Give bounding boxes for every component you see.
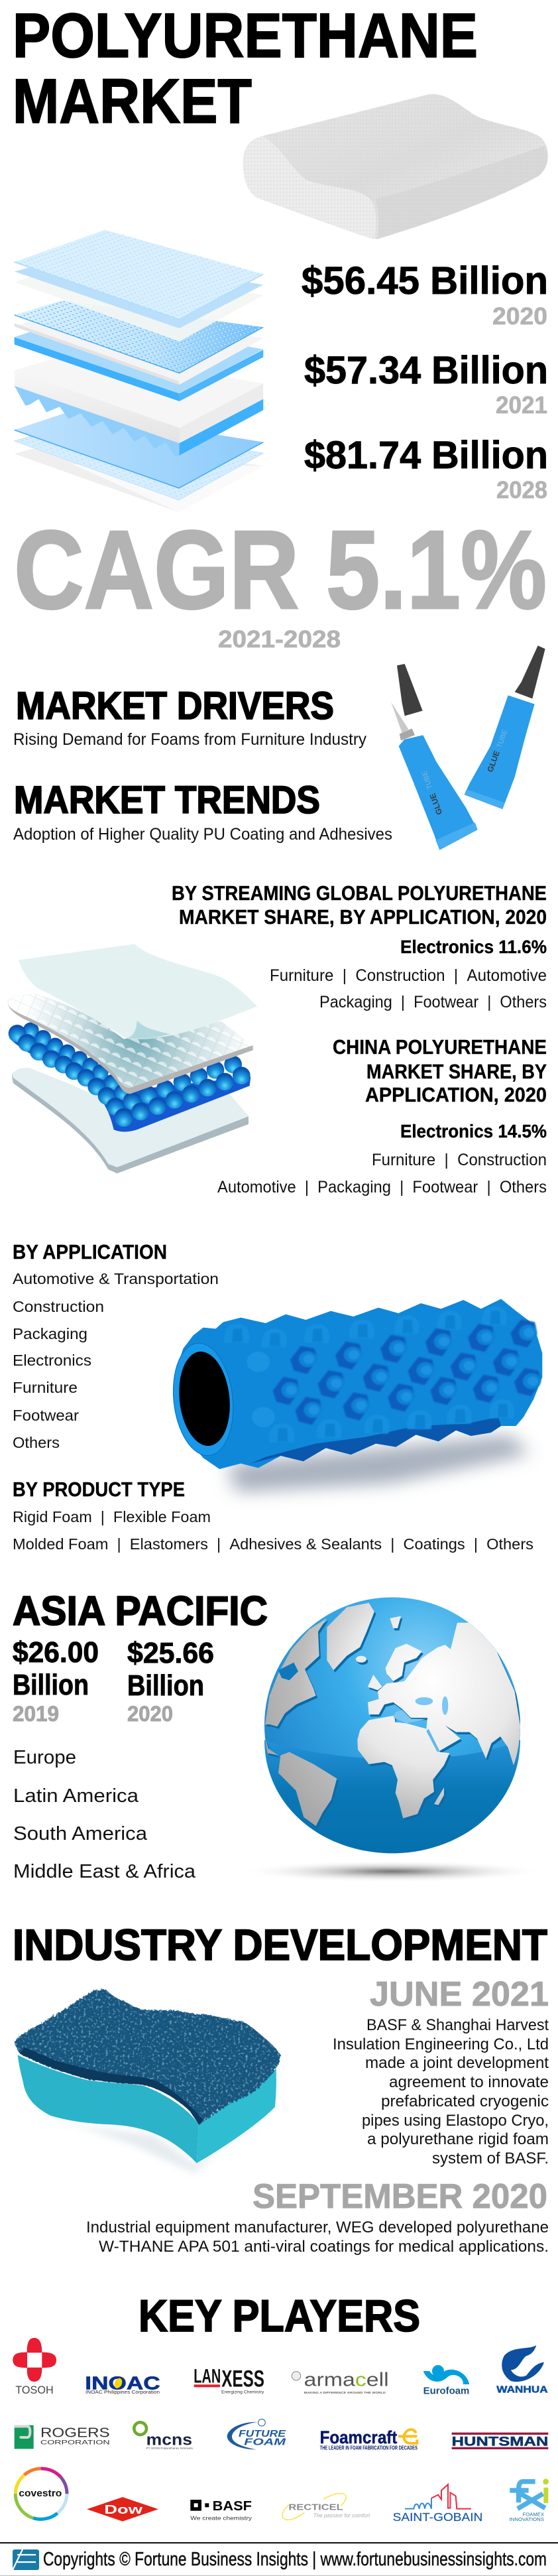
market size figures (302, 259, 548, 503)
market trends (13, 779, 392, 844)
2020 value: 2020 (492, 302, 547, 330)
by application list: Automotive & Transportation (13, 1270, 219, 1287)
logo: MCNS: mcns (146, 2431, 192, 2449)
logo: FXI: INNOVATIONS (510, 2516, 544, 2522)
by application list: Footwear (13, 1407, 79, 1424)
2019 value: $26.00 (13, 1636, 99, 1669)
CAGR callout: 2021-2028 (218, 625, 341, 653)
by application list: Furniture (13, 1379, 78, 1396)
development: June 2021: agreement to innovate (389, 2073, 549, 2091)
image: glue tubes: GLUE (485, 749, 502, 773)
China market share: APPLICATION, 2020 (365, 1083, 547, 1106)
logo: Armacell: MAKING A DIFFERENCE AROUND THE WORLD (304, 2391, 386, 2395)
regional: Asia Pacific (13, 1588, 268, 1726)
2020 value: $56.45 Billion (302, 259, 548, 302)
logo: Recticel: The passion for comfort (313, 2512, 370, 2519)
China market share (217, 1035, 547, 1196)
share value: Electronics 11.6% (400, 936, 547, 957)
development: June 2021: prefabricated cryogenic (381, 2093, 549, 2110)
logo: Recticel (282, 2493, 370, 2520)
logo: Future Foam: FUTURE (239, 2429, 286, 2439)
2020 value (127, 1637, 214, 1726)
logo: Armacell: armacell (304, 2369, 389, 2390)
logo: FXI: FOAMEX (523, 2511, 544, 2517)
development: September 2020: Industrial equipment manufacturer, WEG developed polyurethane (86, 2219, 549, 2236)
logo: Recticel: RECTICEL (288, 2502, 343, 2512)
logo: Huntsman: HUNTSMAN (452, 2435, 548, 2449)
footer (0, 2542, 558, 2576)
by product type: Rigid Foam | Flexible Foam (13, 1508, 211, 1525)
icon: Fortune Business Insights logo (13, 2549, 39, 2570)
2019 value: Billion (13, 1669, 89, 1701)
development: June 2021: JUNE 2021 (370, 1975, 549, 2014)
by application list: Electronics (13, 1352, 91, 1369)
logo: Lanxess: Energizing Chemistry (221, 2390, 264, 2395)
logo: Foamcraft: Foamcraft (320, 2427, 397, 2447)
logo: BASF: BASF (213, 2498, 252, 2514)
image: glue tubes: TUBE (420, 770, 434, 790)
logo: Inoac: INOAC Philippines Corporation (85, 2390, 160, 2395)
logo: Foamcraft: THE LEADER IN FOAM FABRICATION FOR DECADES (320, 2444, 418, 2451)
logo: Tosoh (13, 2338, 56, 2396)
image: scouring sponge (15, 1990, 280, 2173)
logo: Future Foam: FOAM (244, 2437, 286, 2448)
2020 value: Billion (127, 1669, 204, 1702)
logo: FXI (510, 2479, 549, 2522)
by product type: BY PRODUCT TYPE (13, 1478, 185, 1501)
image: glue tubes: TUBE (496, 729, 510, 749)
logos: left half (13, 2338, 286, 2522)
by application list: Construction (13, 1298, 104, 1315)
China market share: Automotive | Packaging | Footwear | Others (217, 1178, 547, 1196)
logo: Rogers: CORPORATION (40, 2439, 110, 2446)
2028 value: 2028 (496, 476, 547, 503)
development: September 2020: W-THANE APA 501 anti-viral coatings for medical applications. (99, 2238, 549, 2256)
by application list (13, 1240, 219, 1451)
logo: Saint-Gobain (393, 2484, 482, 2524)
by application list: Others (13, 1434, 60, 1451)
logo: Rogers (15, 2425, 110, 2449)
logo: Lanxess: LAN (194, 2366, 221, 2388)
global market share (172, 881, 547, 1011)
image: blue foam roller (168, 1299, 542, 1492)
logo: Dow (87, 2497, 158, 2522)
image: exploded mattress layers (15, 230, 263, 512)
development: June 2021 (333, 1975, 549, 2167)
2020 value: $25.66 (127, 1637, 214, 1669)
logo: Eurofoam: Eurofoam (423, 2386, 469, 2396)
other regions list: Europe (13, 1747, 76, 1768)
market drivers: MARKET DRIVERS (16, 684, 334, 728)
logo: Armacell (292, 2369, 389, 2395)
logo: Rogers: ROGERS (40, 2425, 110, 2440)
other regions list: Latin America (13, 1785, 139, 1807)
2021 value: $57.34 Billion (304, 349, 548, 392)
market trends: MARKET TRENDS (14, 779, 320, 822)
other regions list: Middle East & Africa (13, 1861, 196, 1882)
title: MARKET (13, 66, 252, 137)
development: June 2021: a polyurethane rigid foam (367, 2130, 549, 2148)
image: glue tubes: GLUE (428, 792, 444, 816)
segments: Furniture | Construction | Automotive (270, 966, 547, 985)
regional: Asia Pacific: ASIA PACIFIC (13, 1588, 268, 1634)
logo: Covestro (15, 2469, 67, 2519)
logo: BASF (190, 2498, 252, 2521)
market drivers (13, 684, 366, 749)
image: glue tubes (391, 645, 545, 850)
2019 value (13, 1636, 99, 1726)
development: June 2021: BASF & Shanghai Harvest (366, 2016, 549, 2034)
by application list: Packaging (13, 1325, 87, 1342)
logos: right half (282, 2345, 549, 2524)
2028 value (304, 434, 548, 503)
logo: MCNS (134, 2422, 193, 2450)
development: June 2021: Insulation Engineering Co., Ltd (333, 2035, 549, 2053)
logo: MCNS: PT. MCNS Polyurethanes Indonesia (146, 2447, 193, 2450)
image: foam layer cross-section (8, 944, 257, 1173)
image: globe (264, 1597, 520, 1880)
key players heading: KEY PLAYERS (139, 2291, 420, 2341)
by application list: BY APPLICATION (13, 1240, 167, 1263)
logo: Wanhua: WANHUA (496, 2385, 548, 2396)
title (13, 1, 478, 137)
2019 value: 2019 (13, 1702, 59, 1726)
development: June 2021: system of BASF. (432, 2150, 549, 2167)
development: June 2021: made a joint development (365, 2054, 549, 2072)
logo: Huntsman (452, 2433, 548, 2449)
logo: Covestro: covestro (19, 2488, 62, 2499)
2020 value (302, 259, 548, 330)
segments: Furniture | Construction (372, 1151, 547, 1169)
title: POLYURETHANE (13, 1, 478, 71)
by product type: Molded Foam | Elastomers | Adhesives & Sealants | Coatings | Others (13, 1535, 533, 1553)
share value: Electronics 14.5% (400, 1121, 547, 1141)
logo: BASF: We create chemistry (190, 2514, 252, 2521)
development: September 2020: SEPTEMBER 2020 (252, 2177, 547, 2216)
development: June 2021: pipes using Elastopo Cryo, (362, 2112, 549, 2130)
logo: Wanhua (496, 2345, 548, 2396)
market trends: Adoption of Higher Quality PU Coating and Adhesives (13, 825, 392, 844)
2020 value: 2020 (127, 1702, 173, 1726)
2028 value: $81.74 Billion (304, 434, 548, 477)
2021 value (304, 349, 548, 419)
logo: Eurofoam (423, 2365, 469, 2396)
image: memory foam pillow (243, 94, 548, 239)
other regions list (13, 1747, 196, 1882)
other regions list: South America (13, 1823, 148, 1844)
by product type (13, 1478, 533, 1553)
market drivers: Rising Demand for Foams from Furniture Industry (13, 730, 366, 749)
global market share: Packaging | Footwear | Others (319, 993, 547, 1011)
logo: Lanxess (194, 2366, 264, 2395)
logo: Dow: Dow (104, 2502, 143, 2516)
logo: Future Foam (227, 2419, 286, 2449)
logo: Inoac: INOAC (85, 2373, 160, 2394)
logo: Tosoh: TOSOH (15, 2384, 54, 2396)
logo: Lanxess: XESS (221, 2366, 264, 2392)
logo: Saint-Gobain: SAINT-GOBAIN (393, 2510, 482, 2524)
development: September 2020 (86, 2177, 549, 2256)
2021 value: 2021 (496, 391, 547, 419)
